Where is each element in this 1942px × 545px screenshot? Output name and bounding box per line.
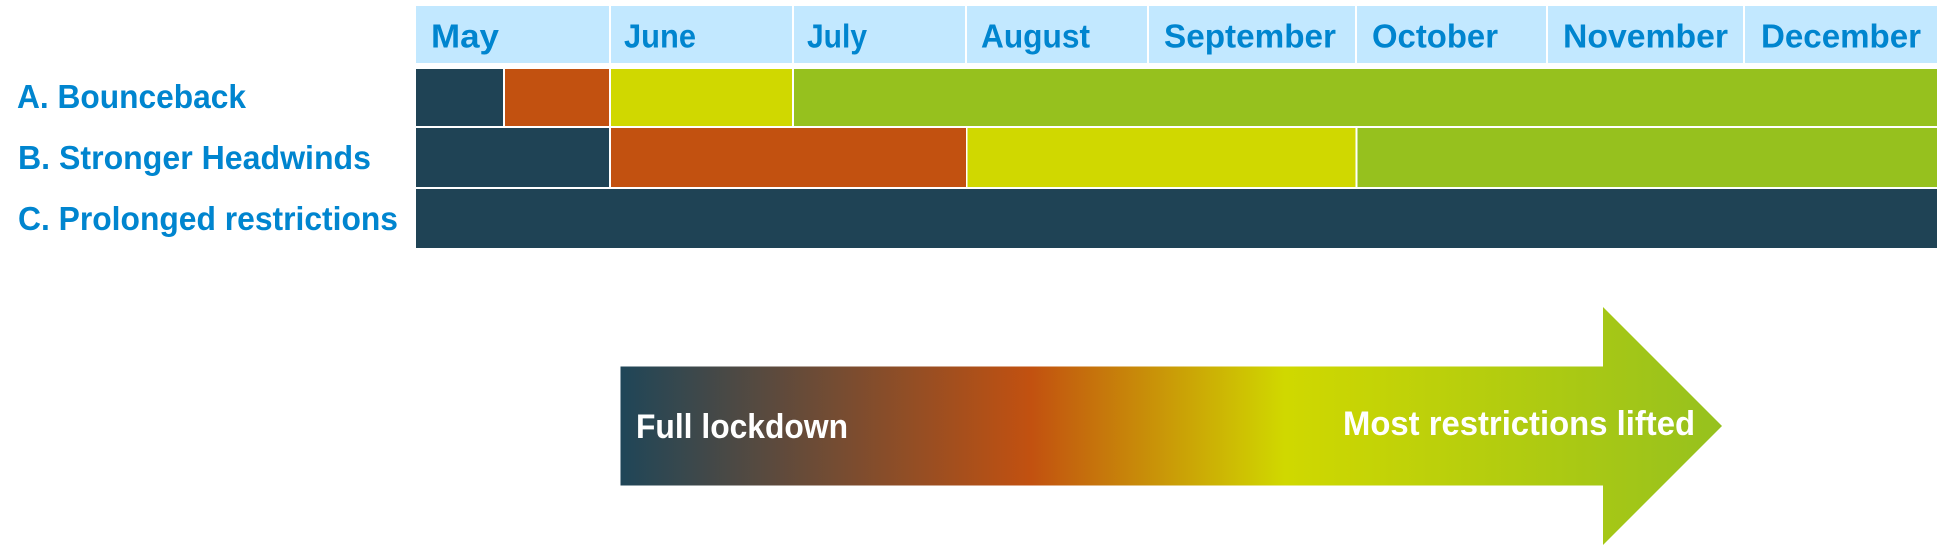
- arrow label: Full lockdown: Full lockdown: [636, 408, 848, 446]
- gradient arrow legend: [620, 307, 1722, 545]
- month: October: October: [1372, 18, 1498, 54]
- month: December: [1745, 6, 1937, 63]
- month: September: September: [1164, 18, 1336, 54]
- timeline row A: Bounceback: [416, 69, 1937, 126]
- scenario label: A. Bounceback: A. Bounceback: [17, 78, 247, 115]
- month: December: December: [1761, 18, 1921, 54]
- timeline row C: Prolonged restrictions: [416, 189, 1937, 248]
- month: June: June: [624, 18, 696, 54]
- month: June: [611, 6, 792, 63]
- month: July: [794, 6, 965, 63]
- month: August: August: [981, 18, 1090, 54]
- month: October: [1357, 6, 1546, 63]
- month: November: November: [1563, 18, 1728, 54]
- scenario label: B. Stronger Headwinds: B. Stronger Headwinds: [18, 139, 371, 176]
- month: May: May: [431, 18, 500, 54]
- timeline row B: Stronger Headwinds: [416, 128, 1937, 187]
- month: May: [416, 6, 609, 63]
- month header row: [416, 6, 1937, 63]
- arrow label: Most restrictions lifted: Most restrictions lifted: [1343, 405, 1695, 443]
- scenario label: C. Prolonged restrictions: C. Prolonged restrictions: [18, 200, 398, 237]
- month: August: [967, 6, 1147, 63]
- arrow shape: [620, 307, 1722, 545]
- month: July: July: [807, 18, 868, 54]
- month: September: [1149, 6, 1355, 63]
- month: November: [1548, 6, 1743, 63]
